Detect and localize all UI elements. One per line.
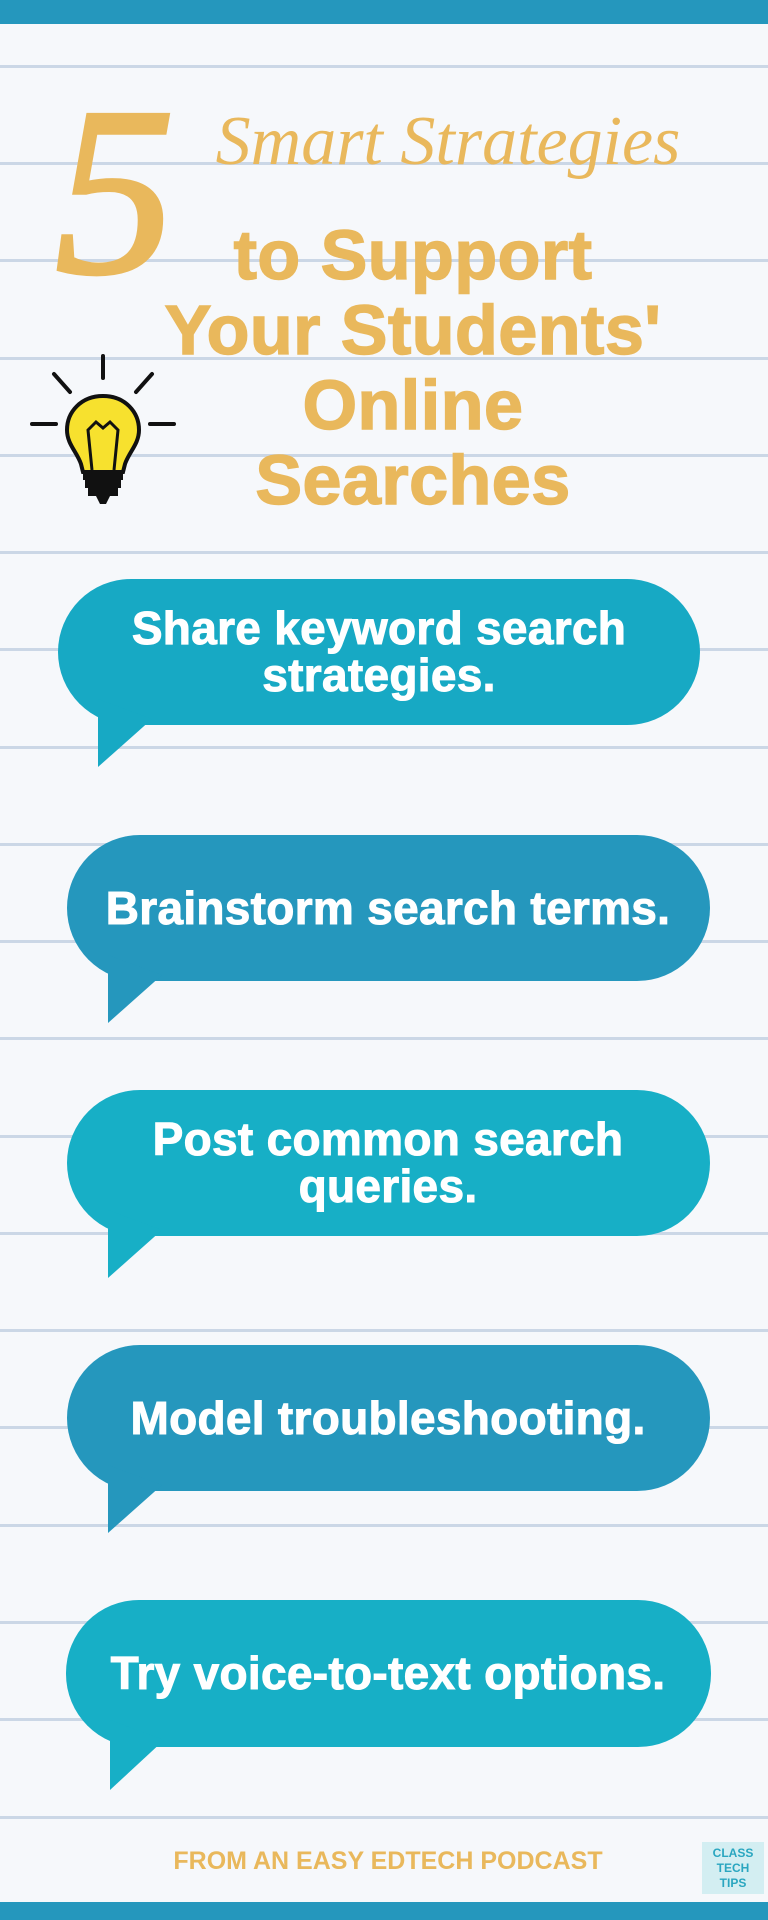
top bar xyxy=(0,0,768,24)
bubble 4 xyxy=(67,1345,710,1533)
bubble 1: strategies. xyxy=(262,649,496,701)
logo: TIPS xyxy=(720,1876,746,1890)
bubble 4: Model troubleshooting. xyxy=(130,1392,646,1444)
bubble 1 xyxy=(58,579,700,767)
bubble 1: Share keyword search xyxy=(132,602,626,654)
bubble 2: Brainstorm search terms. xyxy=(106,882,670,934)
logo xyxy=(702,1842,764,1894)
main heading: Your Students' xyxy=(165,291,661,369)
bottom bar xyxy=(0,1902,768,1920)
main heading: Online xyxy=(303,366,523,444)
bubble 5: Try voice-to-text options. xyxy=(111,1647,665,1699)
bubble 3 xyxy=(67,1090,710,1278)
logo: CLASS xyxy=(713,1846,753,1860)
logo: TECH xyxy=(717,1861,749,1875)
bubble 5 xyxy=(66,1600,711,1790)
bubble 3: queries. xyxy=(299,1160,477,1212)
bubble 3: Post common search xyxy=(153,1113,623,1165)
icon: light bulb xyxy=(30,354,176,504)
main heading xyxy=(164,216,661,519)
main heading: to Support xyxy=(234,216,592,294)
bubble 2 xyxy=(67,835,710,1023)
script subtitle: Smart Strategies xyxy=(216,103,680,180)
title xyxy=(55,58,680,519)
big number 5: 5 xyxy=(55,58,175,324)
main heading: Searches xyxy=(255,441,571,519)
footer text: FROM AN EASY EDTECH PODCAST xyxy=(173,1847,603,1875)
